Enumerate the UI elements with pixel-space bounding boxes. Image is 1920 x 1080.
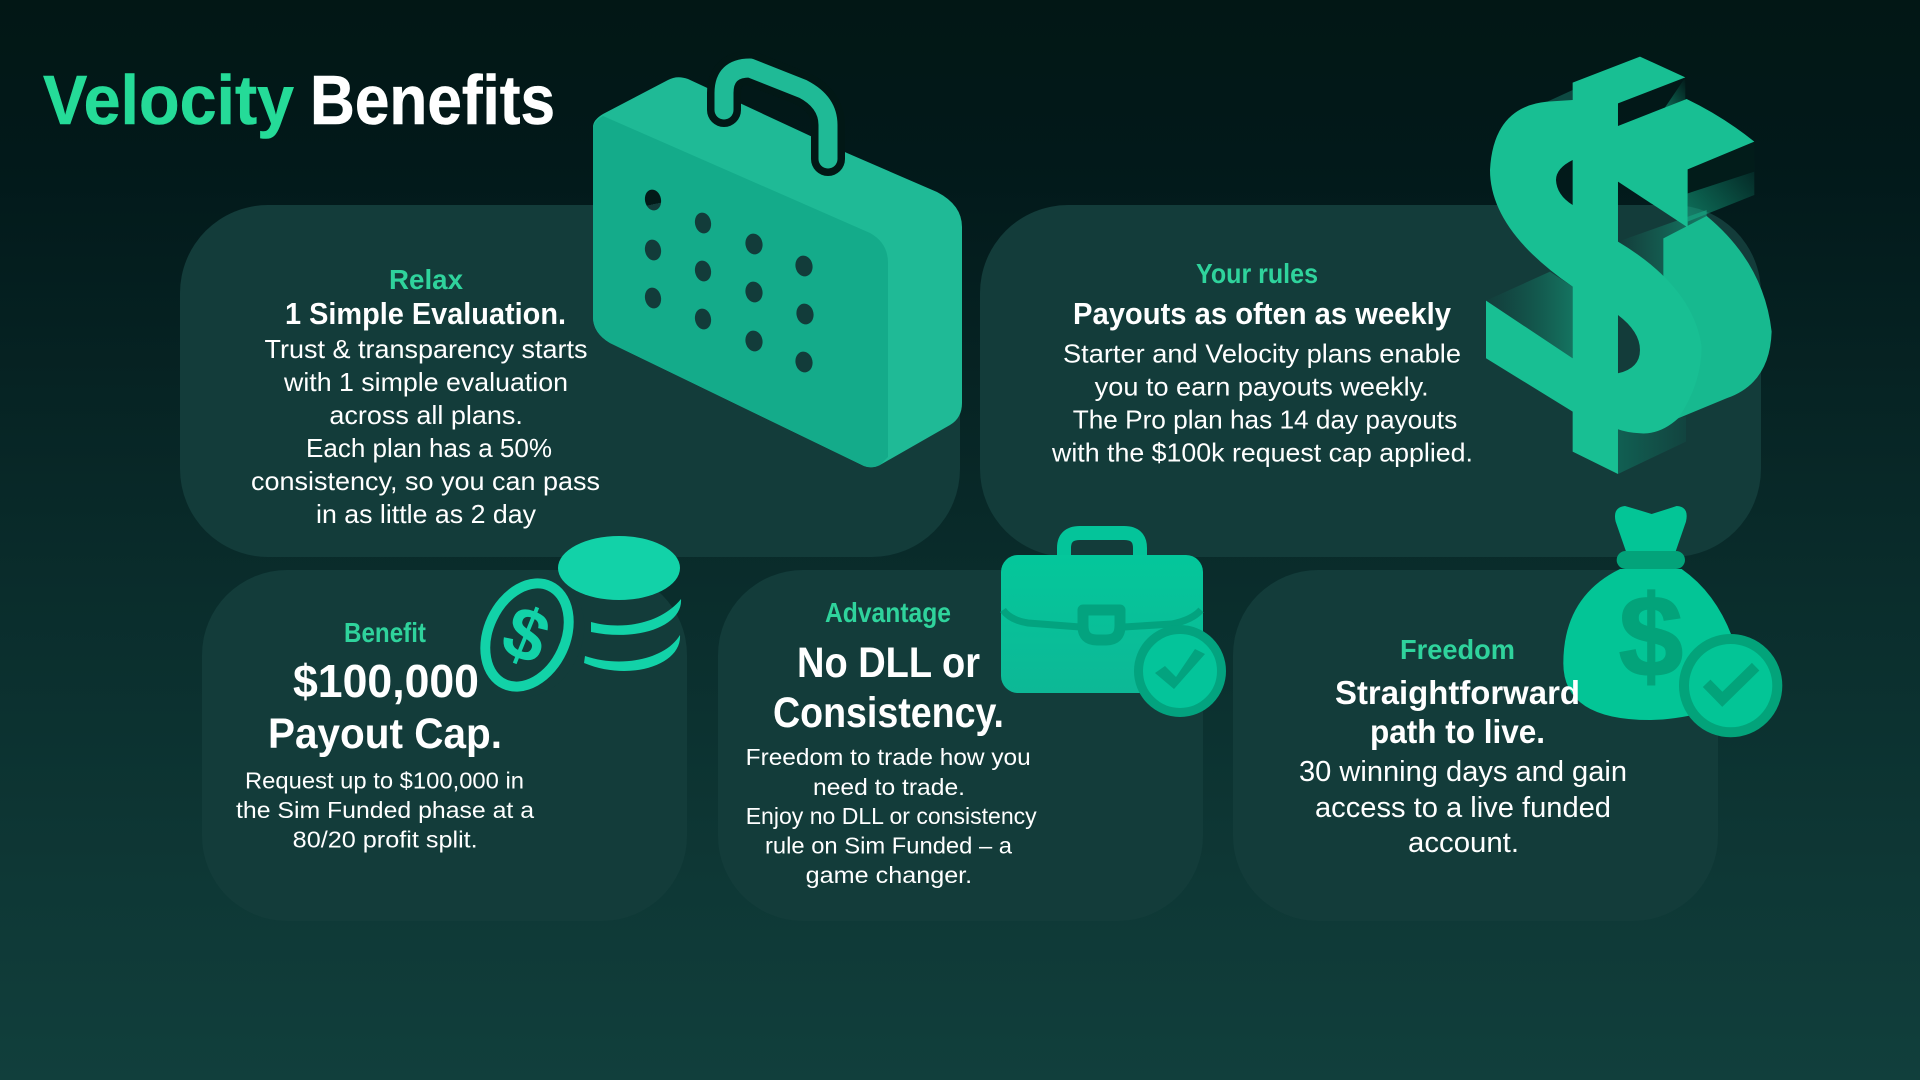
text block: your rules [1051,258,1473,468]
icon: dollar coin [469,568,602,712]
icon: briefcase with check [1001,533,1222,712]
text block: relax: Relax [389,264,463,295]
text block: relax: Trust & transparency starts [264,334,588,364]
text block: relax: Each plan has a 50% [306,433,552,463]
text block: your rules: you to earn payouts weekly. [1095,372,1429,402]
title: Benefits [310,61,555,139]
text block: freedom: path to live. [1370,713,1545,750]
text block: benefit: $100,000 [293,655,479,707]
icon: money bag with check [1563,506,1777,732]
text block: advantage: Freedom to trade how you [746,744,1031,770]
text block: advantage: rule on Sim Funded – a [765,832,1013,858]
text block: freedom: account. [1408,827,1519,859]
text block: freedom: Freedom [1400,634,1515,665]
text block: freedom: 30 winning days and gain [1299,756,1627,788]
text block: benefit [236,617,535,852]
icon: dollar coin: $ [492,588,561,681]
icon: isometric dollar sign [1486,57,1772,474]
panel: relax [180,205,960,557]
text block: advantage: need to trade. [813,774,965,800]
title [43,61,555,139]
text block: advantage: Advantage [825,597,951,628]
text block: relax: consistency, so you can pass [251,466,600,496]
text block: your rules: Payouts as often as weekly [1073,296,1452,331]
text block: advantage: Enjoy no DLL or consistency [746,803,1037,829]
text block: benefit: 80/20 profit split. [293,826,478,852]
icon: money bag with check: $ [1619,573,1683,701]
text block: your rules: The Pro plan has 14 day payouts [1073,405,1457,435]
text block: advantage: Consistency. [773,689,1004,737]
panel: advantage [718,570,1203,921]
text block: your rules: Your rules [1196,258,1318,289]
text block: relax: in as little as 2 day [316,499,536,529]
icon: isometric case with dots [593,68,962,467]
text block: relax: with 1 simple evaluation [283,367,568,397]
text block: your rules: with the $100k request cap applied. [1051,438,1473,468]
text block: freedom [1299,634,1627,859]
text block: relax: 1 Simple Evaluation. [285,296,566,331]
text block: relax [251,264,600,529]
text block: benefit: Payout Cap. [268,710,502,758]
text block: benefit: the Sim Funded phase at a [236,797,535,823]
icon: coin stack [469,536,681,712]
text block: advantage: No DLL or [797,639,980,687]
text block: advantage [746,597,1037,888]
panel: freedom [1233,570,1718,921]
panel: benefit [202,570,687,921]
text block: freedom: access to a live funded [1315,792,1611,824]
text block: advantage: game changer. [806,862,972,888]
text block: relax: across all plans. [329,400,523,430]
title: Velocity [43,61,294,139]
text block: freedom: Straightforward [1335,674,1580,711]
panel: your rules [980,205,1761,557]
text block: benefit: Benefit [344,617,426,648]
text block: your rules: Starter and Velocity plans enable [1063,338,1461,368]
text block: benefit: Request up to $100,000 in [245,768,524,794]
